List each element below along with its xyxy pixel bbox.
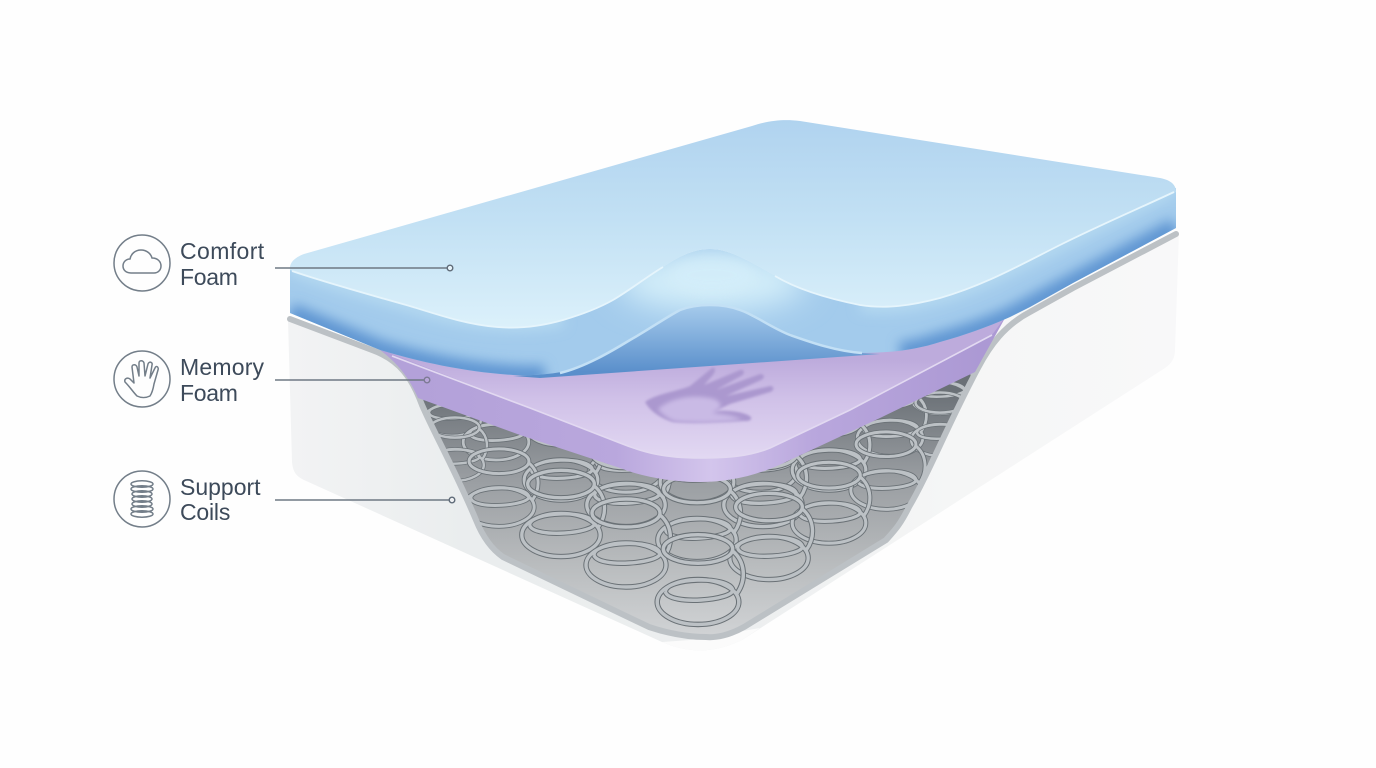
leader line xyxy=(275,265,453,271)
comfort foam side xyxy=(290,188,1176,376)
leader line xyxy=(275,377,430,383)
underside arch of foam xyxy=(513,303,880,378)
grey rim of base xyxy=(290,234,1176,637)
memory foam top surface xyxy=(390,320,1003,458)
text: Memory Foam: Foam xyxy=(180,380,238,406)
icon: coil xyxy=(114,471,170,527)
text: Memory Foam: Memory xyxy=(180,354,265,380)
icon: cloud xyxy=(114,235,170,291)
icon: hand xyxy=(114,351,170,407)
support coils xyxy=(423,350,972,624)
text: Comfort Foam: Foam xyxy=(180,264,238,290)
leader line xyxy=(275,497,455,503)
coil cavity xyxy=(423,374,972,634)
text: Support Coils: Coils xyxy=(180,499,230,525)
surface highlight edge xyxy=(292,192,1174,328)
highlight under arch xyxy=(560,305,862,373)
memory foam layer xyxy=(380,318,1005,482)
text: Comfort Foam: Comfort xyxy=(180,238,265,264)
comfort foam layer xyxy=(280,120,1190,390)
text: Support Coils: Support xyxy=(180,474,261,500)
memory foam side xyxy=(380,318,1005,482)
label: comfort foam xyxy=(114,235,453,291)
icon: hand impression xyxy=(645,368,773,423)
mattress base xyxy=(288,232,1179,650)
label: support coils xyxy=(114,471,455,527)
comfort foam top surface xyxy=(290,120,1176,328)
label: memory foam xyxy=(114,351,430,407)
mattress illustration xyxy=(280,120,1190,650)
